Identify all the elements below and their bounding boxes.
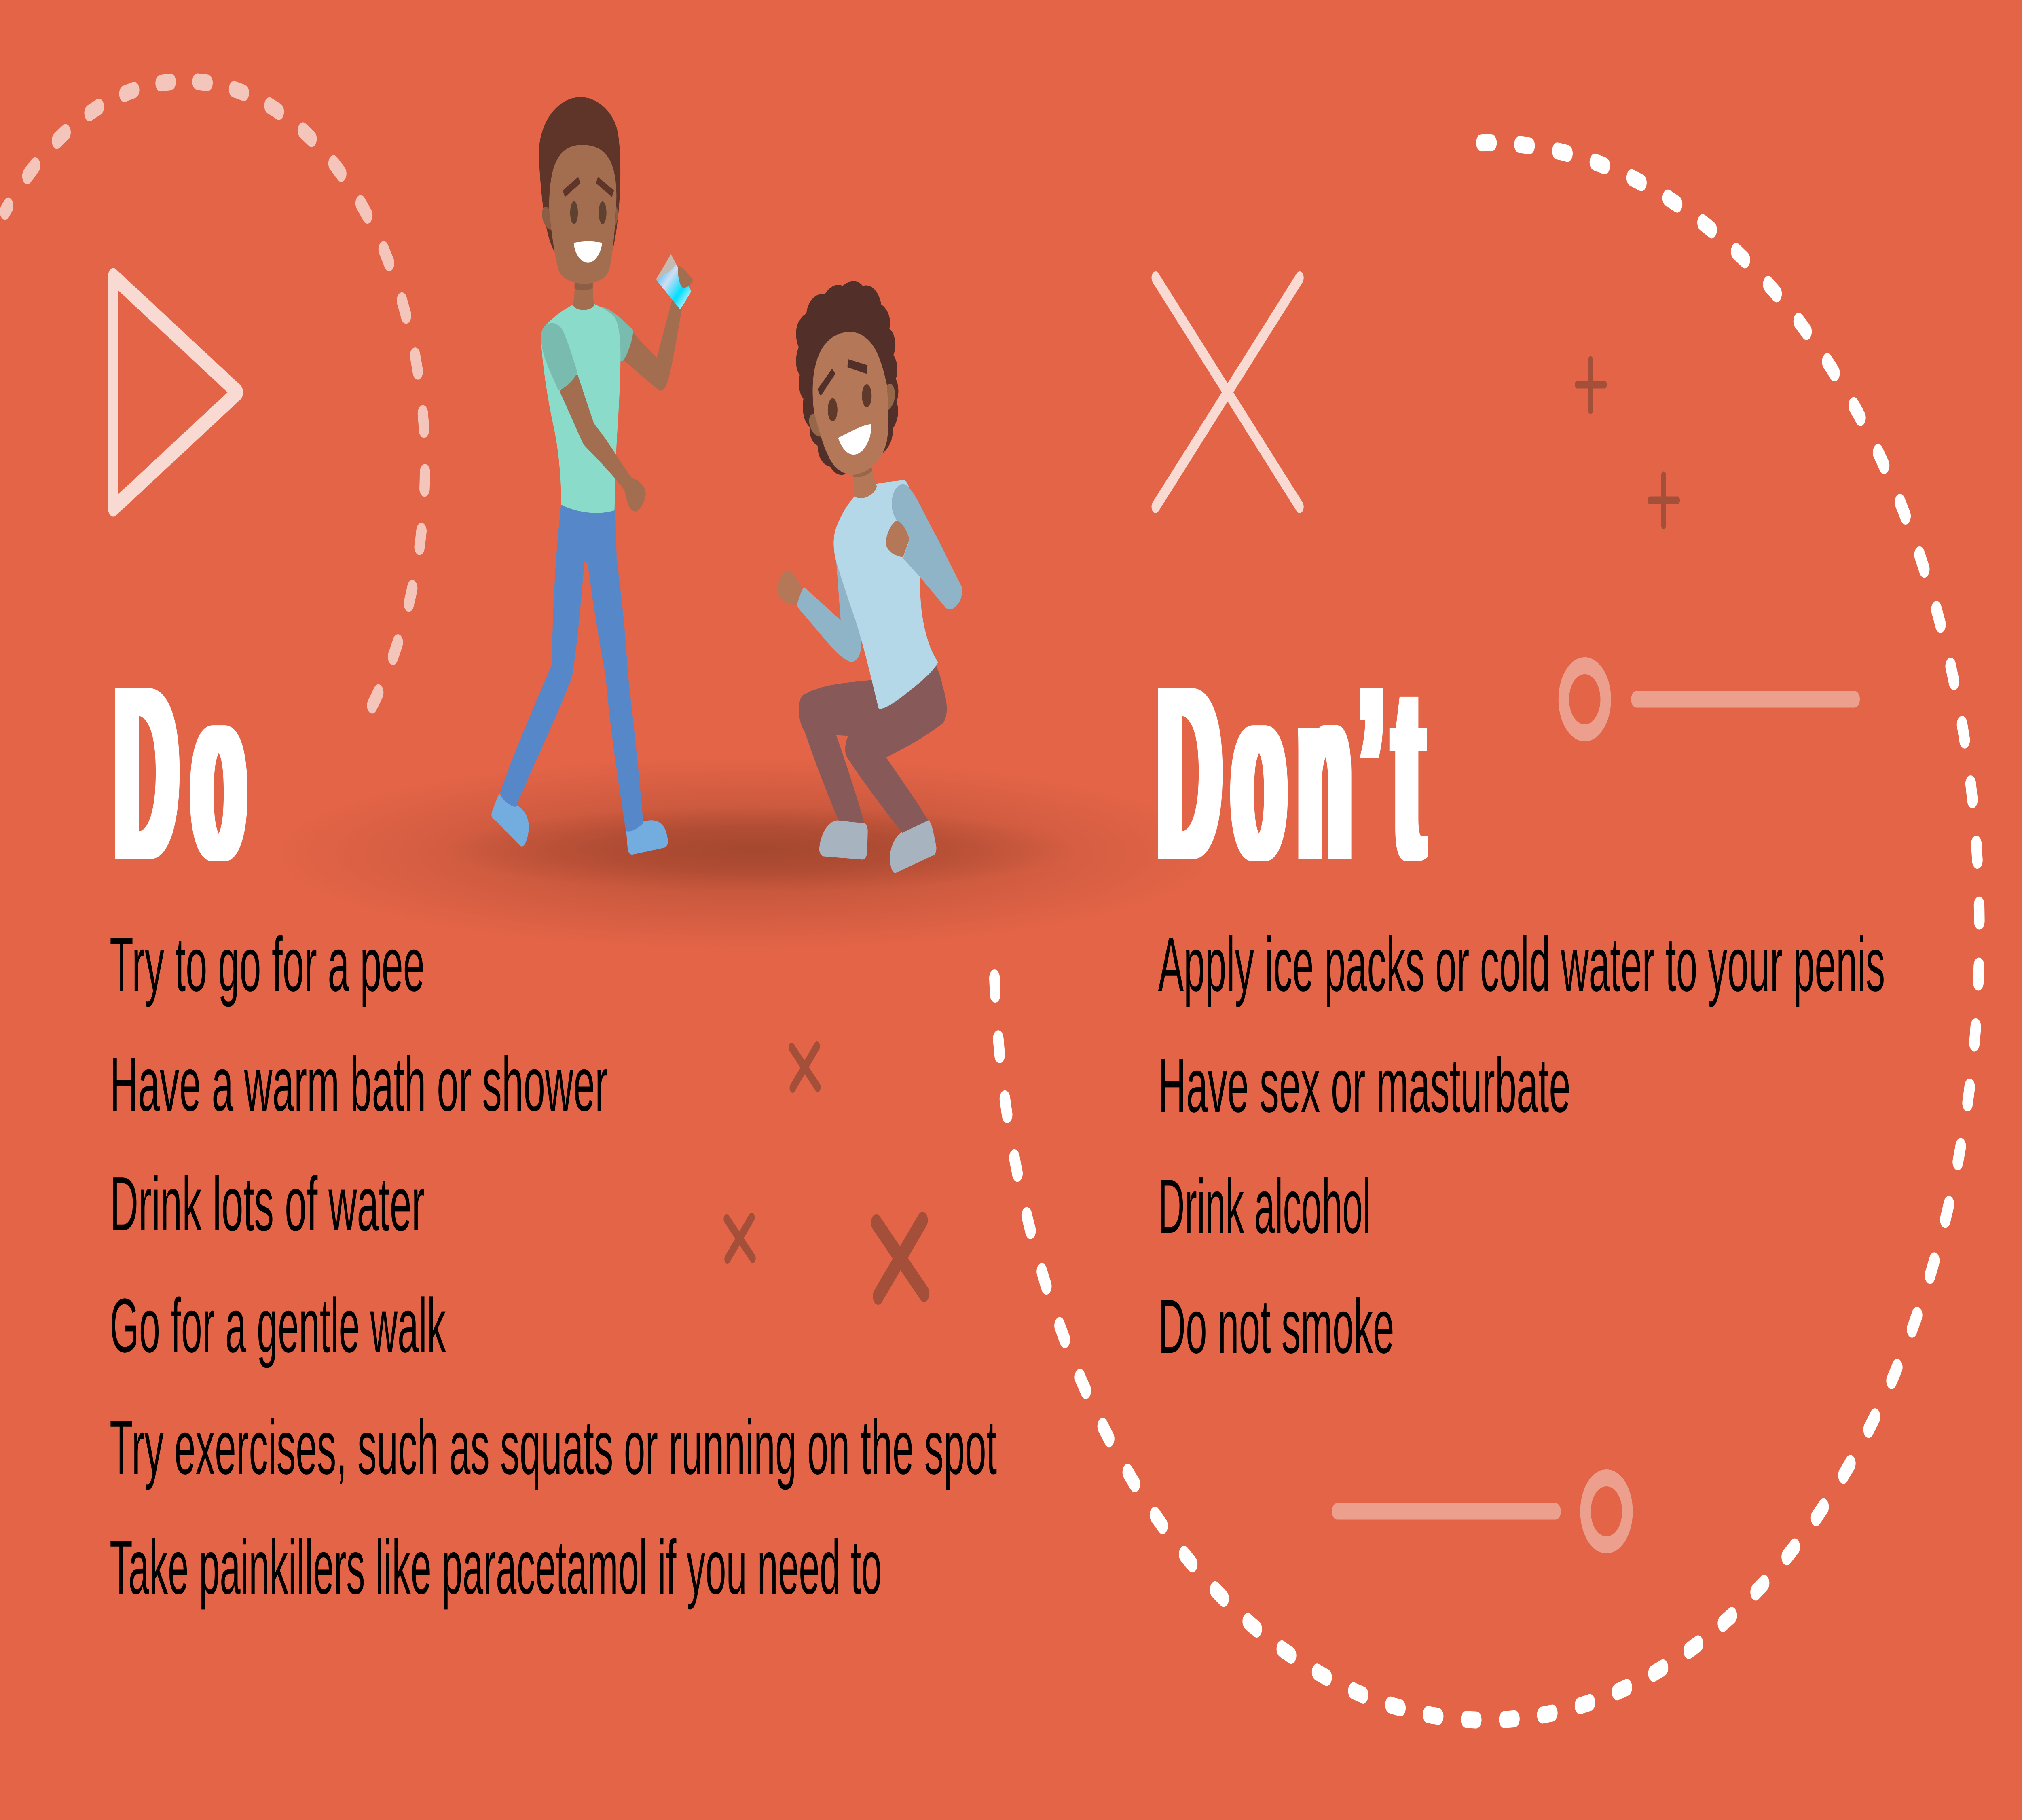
neck	[852, 468, 877, 498]
don't item 2: Have sex or masturbate	[1158, 1043, 1571, 1128]
raised arm	[623, 300, 683, 391]
don't item 4: Do not smoke	[1158, 1284, 1394, 1369]
curly hair	[796, 281, 898, 475]
figure: man squatting	[777, 281, 962, 873]
man 1 upper body and head	[541, 254, 693, 513]
do item 2: Have a warm bath or shower	[110, 1041, 608, 1127]
decorative crosses	[727, 1046, 924, 1296]
far sleeve	[600, 307, 633, 361]
figure: man with glass of water	[491, 97, 693, 855]
dashed arc: do	[5, 81, 425, 705]
hair	[539, 97, 620, 252]
face	[813, 332, 888, 475]
list: don't	[1158, 922, 1885, 1369]
do item 3: Drink lots of water	[110, 1161, 425, 1247]
left arm	[797, 561, 862, 662]
left hand	[777, 570, 802, 605]
ground shadow	[278, 758, 1213, 948]
glass of water	[656, 254, 693, 309]
icon: play triangle	[113, 276, 238, 508]
heading: Don't: Don’t	[1158, 634, 1423, 912]
neck	[573, 282, 594, 310]
ring and line: upper	[1564, 666, 1855, 733]
face	[549, 145, 616, 284]
heading: Do: Do	[115, 634, 245, 912]
eyes	[828, 384, 871, 421]
man 1 front arm	[560, 374, 646, 512]
ring and line: lower	[1337, 1478, 1627, 1545]
right hand	[886, 521, 909, 557]
man 1 legs and shoes	[491, 502, 668, 855]
dashed arc: don't	[994, 143, 1980, 1720]
icon: large cross	[1156, 278, 1300, 507]
eyes	[570, 201, 607, 224]
near sleeve	[541, 323, 577, 390]
smile	[574, 241, 602, 263]
list: do	[110, 922, 997, 1610]
ears	[809, 384, 895, 437]
don't item 3: Drink alcohol	[1158, 1164, 1371, 1249]
do item 1: Try to go for a pee	[110, 922, 425, 1007]
right arm	[892, 484, 962, 609]
eyebrows	[563, 177, 614, 197]
sweater	[833, 480, 938, 709]
shoes	[819, 821, 937, 873]
do item 4: Go for a gentle walk	[110, 1283, 446, 1369]
do item 5: Try exercises, such as squats or running on the spot	[110, 1405, 997, 1490]
smile	[838, 424, 871, 455]
trousers	[799, 666, 947, 833]
decorative plus signs	[1577, 360, 1677, 525]
eyebrows	[818, 359, 867, 396]
do item 6: Take painkillers like paracetamol if you need to	[110, 1524, 882, 1610]
t-shirt	[541, 304, 620, 513]
ears	[542, 207, 618, 230]
man 1 head	[539, 97, 620, 390]
